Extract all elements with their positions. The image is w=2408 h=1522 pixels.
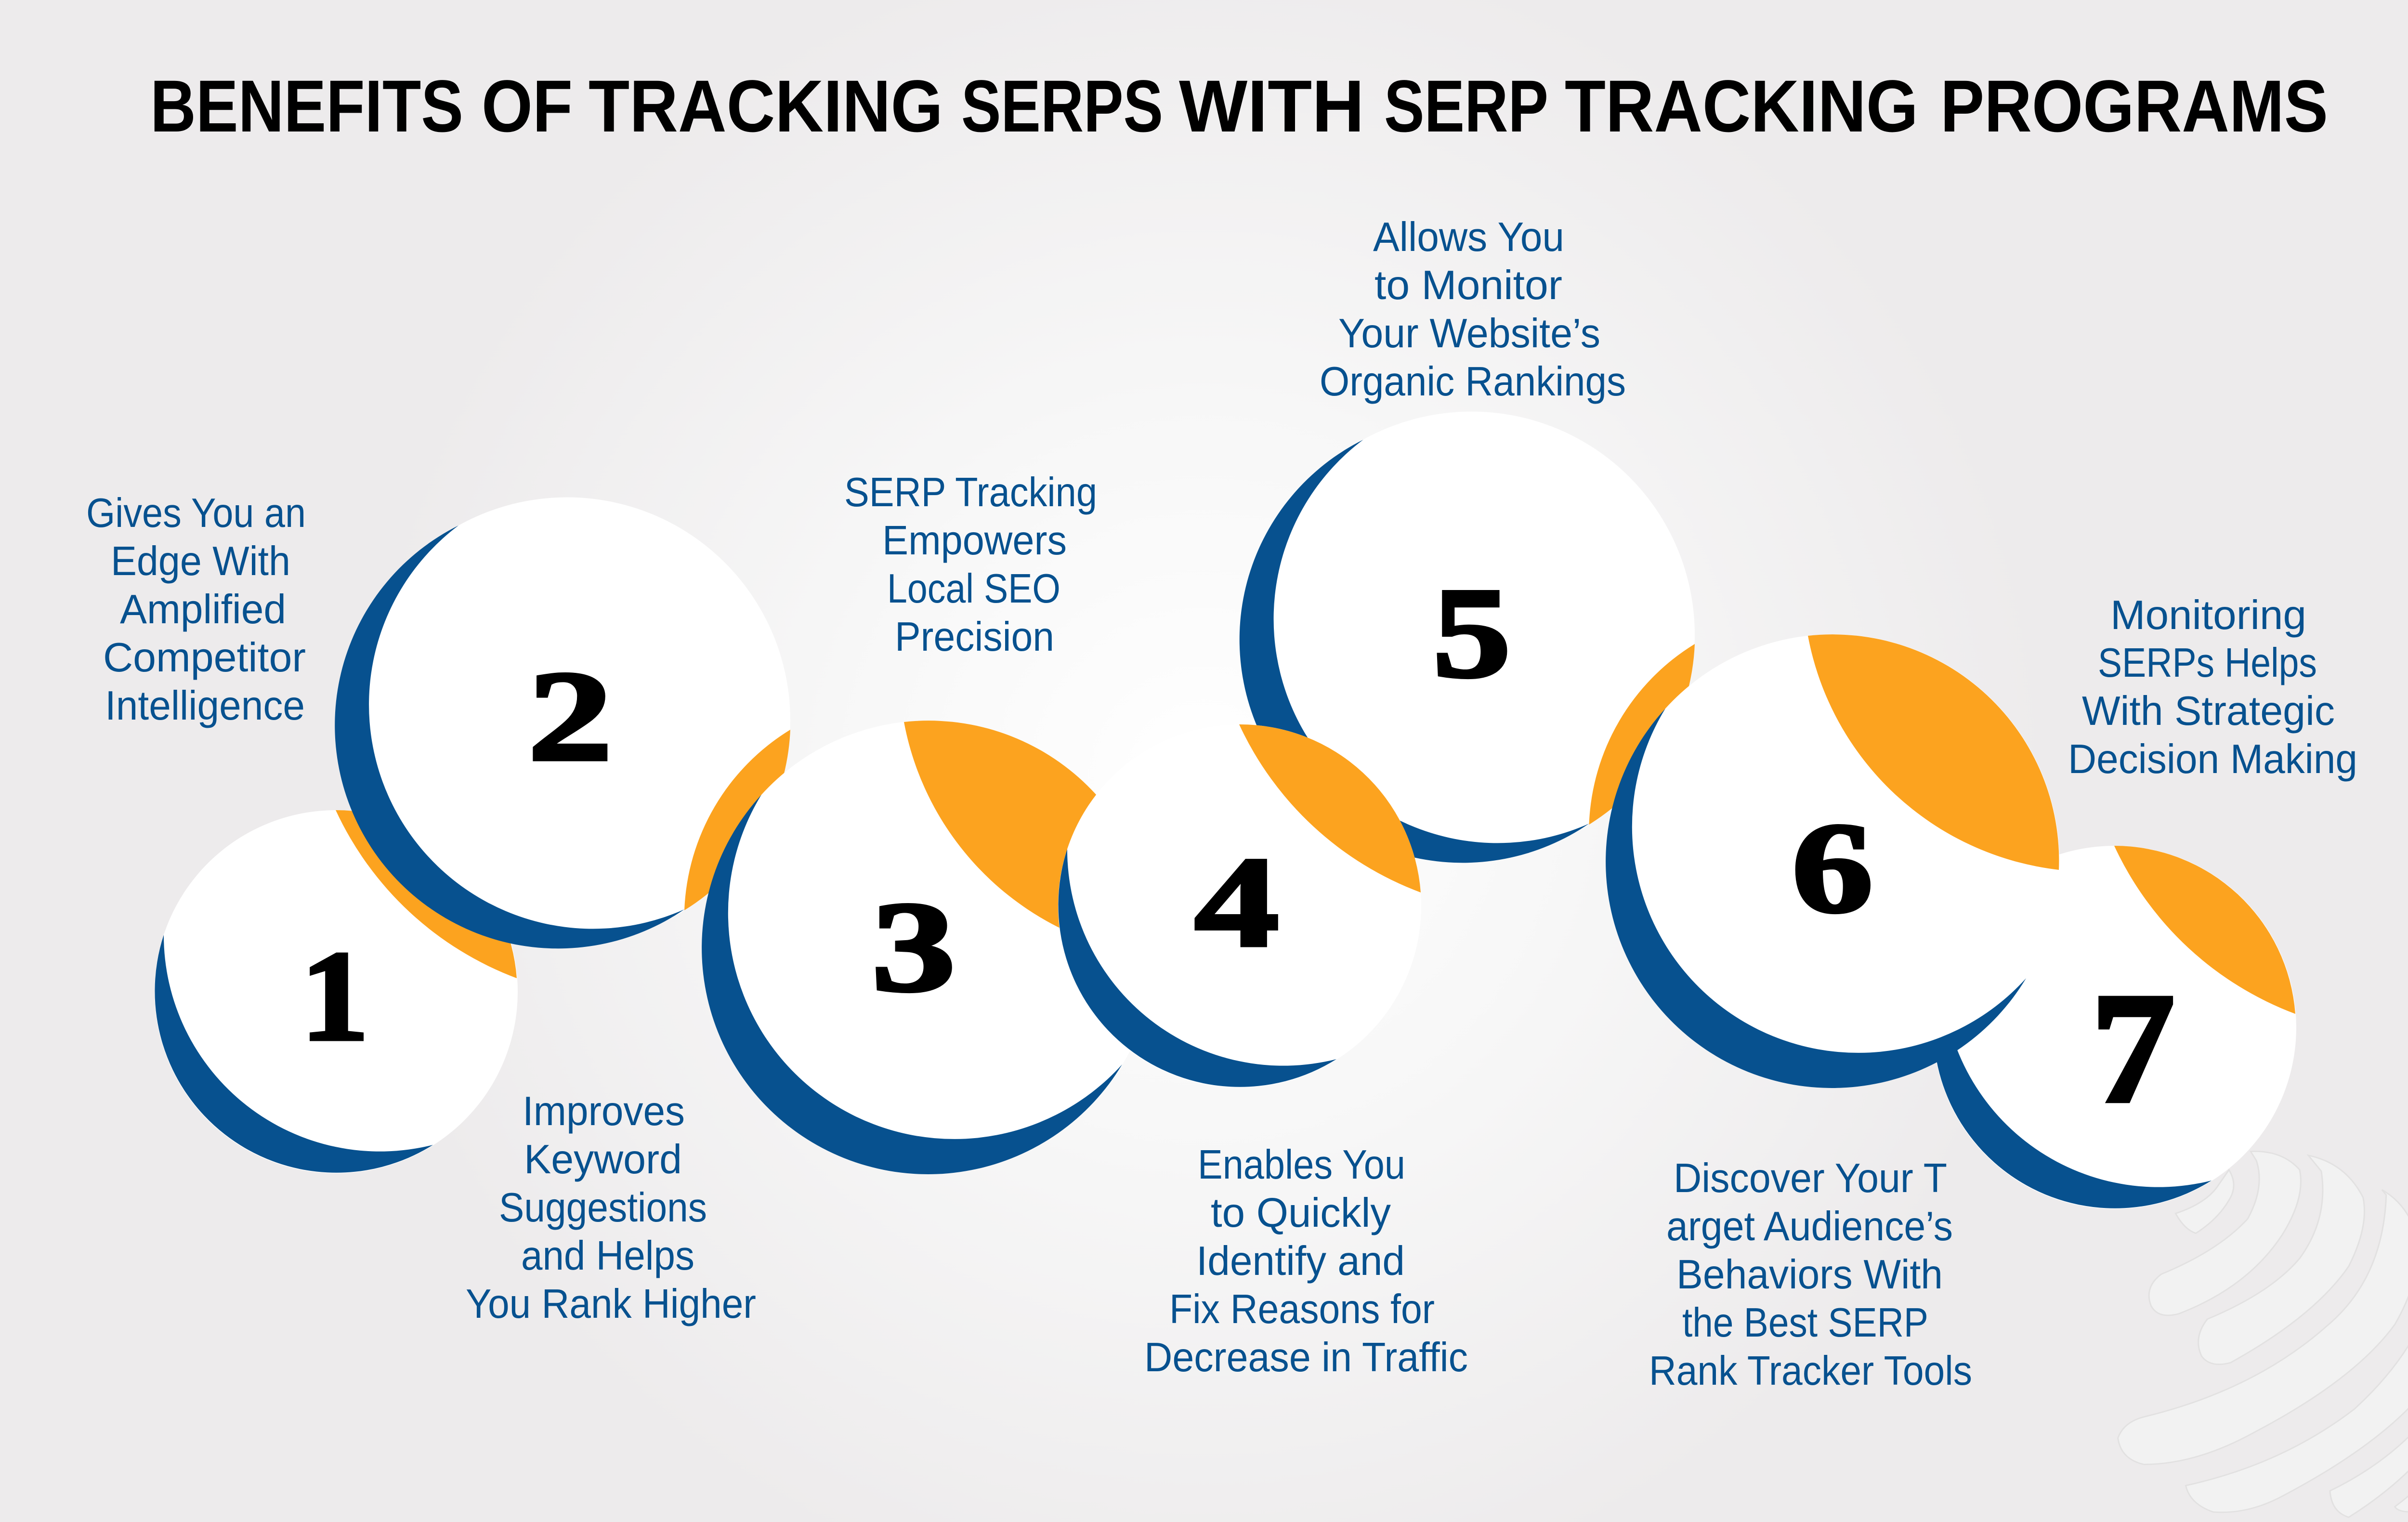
text block 4: Identify and [1196, 1238, 1405, 1284]
title: OF [482, 65, 573, 147]
decorative globe watermark [2118, 1151, 2408, 1517]
text block 7 [2068, 592, 2357, 782]
text block 1 [86, 490, 306, 729]
text block 7: Decision Making [2068, 736, 2357, 782]
text block 2: You Rank Higher [466, 1281, 756, 1327]
text block 3: Local SEO [887, 566, 1060, 612]
text block 2: and Helps [521, 1233, 694, 1279]
circle 3 [702, 721, 1155, 1174]
text block 6: Discover Your T [1674, 1155, 1947, 1201]
title: TRACKING [1565, 65, 1918, 147]
text block 4: to Quickly [1211, 1190, 1391, 1236]
text block 1: Edge With [111, 538, 290, 584]
text block 6 [1649, 1155, 1972, 1394]
title: WITH [1179, 65, 1364, 147]
text block 5: Organic Rankings [1320, 359, 1626, 405]
circle 4: 4 [1194, 830, 1279, 973]
text block 4: Decrease in Traffic [1144, 1335, 1468, 1380]
text block 4 [1144, 1142, 1468, 1380]
circle 7 [1933, 846, 2296, 1209]
text block 5: Your Website’s [1338, 311, 1600, 356]
text block 4: Enables You [1198, 1142, 1405, 1188]
circle 2: 2 [528, 644, 613, 787]
text block 6: Rank Tracker Tools [1649, 1348, 1972, 1394]
text block 6: arget Audience’s [1666, 1204, 1953, 1249]
text block 7: Monitoring [2110, 592, 2306, 638]
text block 3: SERP Tracking [844, 470, 1097, 515]
text block 2: Suggestions [499, 1185, 707, 1231]
text block 1: Gives You an [86, 490, 306, 536]
text block 7: With Strategic [2082, 688, 2335, 734]
text block 2: Keyword [524, 1137, 682, 1182]
title: SERPS [961, 65, 1163, 147]
text block 7: SERPs Helps [2098, 640, 2317, 686]
text block 3: Precision [895, 614, 1054, 660]
text block 3 [844, 470, 1097, 660]
text block 1: Competitor [103, 635, 306, 681]
text block 5: Allows You [1373, 214, 1564, 260]
text block 6: Behaviors With [1676, 1252, 1943, 1298]
circle 3: 3 [872, 876, 955, 1019]
circle 5 [1240, 411, 1695, 863]
title: TRACKING [589, 65, 943, 147]
circle 7: 7 [2091, 961, 2175, 1136]
circle 6 [1606, 634, 2059, 1088]
circle 1: 1 [301, 924, 369, 1067]
text block 1: Amplified [120, 587, 286, 632]
text block 5: to Monitor [1374, 262, 1562, 308]
text block 3: Empowers [882, 518, 1067, 564]
circle 2 [335, 497, 790, 948]
text block 1: Intelligence [105, 683, 305, 729]
title: BENEFITS [150, 65, 463, 147]
text block 2: Improves [523, 1089, 685, 1134]
text block 2 [466, 1089, 756, 1327]
circle 5: 5 [1433, 562, 1511, 705]
text block 4: Fix Reasons for [1169, 1286, 1435, 1332]
text block 5 [1320, 214, 1626, 405]
text block 6: the Best SERP [1682, 1300, 1928, 1346]
title: SERP [1384, 65, 1548, 147]
circle 6: 6 [1792, 796, 1873, 939]
circle 4 [1058, 724, 1421, 1088]
title: PROGRAMS [1940, 65, 2328, 147]
circle 1 [155, 810, 518, 1173]
title [150, 65, 2328, 147]
